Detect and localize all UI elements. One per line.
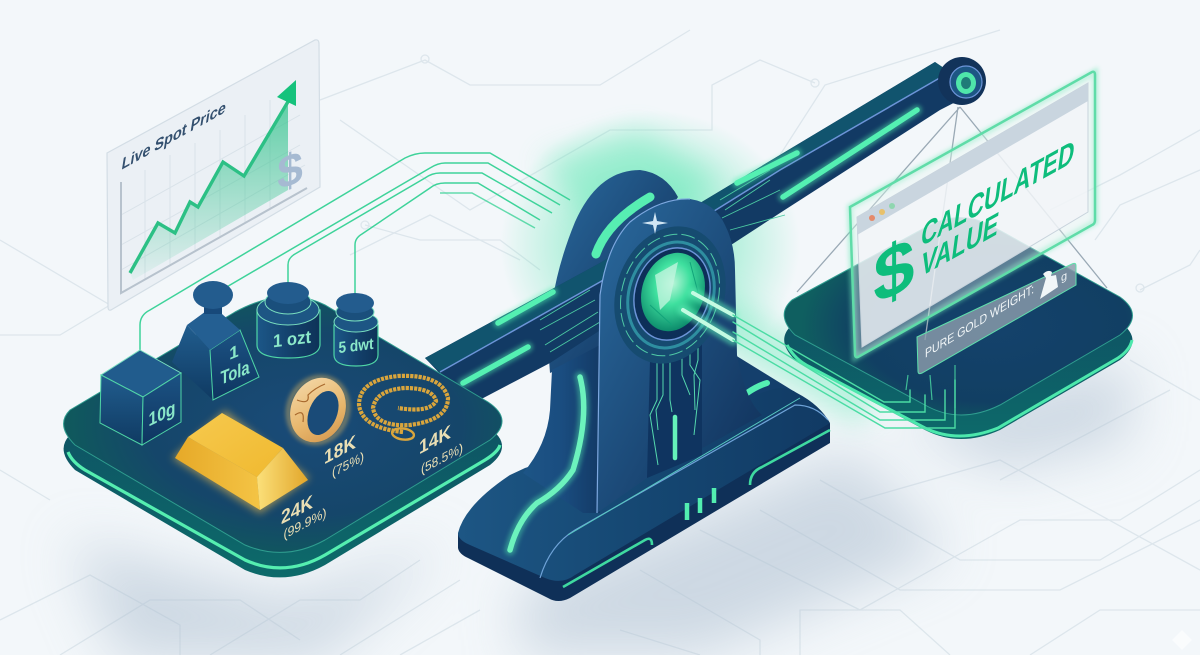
label: 24K: 24K (281, 491, 313, 529)
weight: 1 ozt (257, 282, 320, 358)
stand front pillar (597, 199, 762, 513)
top surface (784, 218, 1132, 415)
title bar (857, 83, 1088, 235)
cylinder body (334, 325, 378, 366)
suspension strings (797, 107, 1107, 340)
rear slot (747, 383, 767, 393)
glowing leg strip (510, 377, 584, 550)
base green slots (563, 430, 830, 587)
bar text: PURE GOLD WEIGHT: (925, 281, 1034, 361)
platform glowing rim (787, 340, 1132, 436)
base edge highlights (540, 405, 828, 578)
base front wall (458, 423, 830, 601)
window dots (869, 203, 895, 221)
trend line arrow (130, 80, 296, 273)
dollar sign: $ (873, 219, 915, 322)
reflection on platform (906, 365, 955, 408)
weight: 1 Tola: Tola (221, 356, 250, 390)
left platform (64, 296, 502, 577)
bar top (188, 413, 283, 477)
gold ring 18K (279, 369, 357, 451)
green glow behind the fulcrum (500, 110, 880, 425)
bar left slope (175, 437, 260, 510)
pillar rim highlight (597, 199, 690, 513)
chart grid (121, 100, 305, 280)
base rear (700, 355, 795, 450)
cube left face (100, 375, 143, 445)
glow beams (683, 293, 733, 340)
cylinder cap (336, 303, 374, 321)
calculated value window (797, 72, 1107, 408)
stand base (458, 355, 830, 601)
label: 18K (324, 431, 364, 481)
sparkle (642, 212, 668, 234)
lower layer (784, 242, 1132, 439)
arch glowing slot (596, 197, 650, 254)
beam highlight edge (440, 72, 950, 372)
base three indicator bars (687, 488, 714, 520)
stand left leg (523, 345, 600, 513)
dial plate (597, 212, 743, 378)
thin connector lines (733, 315, 955, 428)
ring hole (301, 386, 345, 440)
beam body (425, 62, 975, 405)
label: 1 ozt (273, 327, 311, 351)
emerald gem (631, 244, 715, 340)
body top face (187, 306, 240, 350)
scale beam (425, 57, 986, 405)
label: 10g (148, 397, 176, 431)
inner window (857, 83, 1088, 347)
base top (458, 388, 830, 581)
platform glowing rim (68, 445, 500, 568)
lower layer (64, 321, 502, 577)
dial circuit rings (605, 221, 735, 369)
beam glowing slots (463, 110, 917, 383)
shadows under objects (70, 360, 1130, 655)
unit g: g (1061, 268, 1067, 285)
pillar body (597, 199, 762, 513)
label: 24K (281, 491, 326, 543)
cube top (101, 350, 181, 397)
chart axes (121, 182, 307, 293)
small weight icon (1040, 271, 1058, 299)
beam circuit traces (540, 170, 785, 352)
label: 24K: (99.9%) (284, 505, 326, 543)
back arch of the stand (549, 170, 678, 373)
arch body (549, 170, 678, 373)
central dark channel (647, 335, 702, 478)
beam end cap (938, 57, 986, 105)
calculated value window: VALUE (919, 205, 1001, 285)
ring outer (281, 369, 355, 451)
chart glass card (107, 40, 320, 310)
bar right slope (257, 448, 308, 510)
right platform (784, 218, 1132, 439)
green connector lines from weights (140, 153, 570, 350)
label: 14K: 14K (419, 421, 451, 459)
cylinder cap (265, 290, 311, 314)
glow (172, 410, 310, 514)
bar background (917, 263, 1076, 374)
cube right face (142, 373, 181, 445)
chart area under line (130, 105, 288, 280)
outer glass frame (850, 72, 1095, 357)
gem dial (597, 212, 743, 378)
channel glowing bar (673, 417, 677, 458)
label: 18K: 18K (324, 431, 356, 469)
weight: 1 Tola (172, 281, 259, 400)
label: 1 (229, 341, 239, 364)
label: 14K: (58.5%) (421, 441, 463, 478)
beam upper strip (425, 62, 950, 372)
top surface (64, 296, 502, 552)
frame glow (850, 72, 1095, 358)
ring glow (279, 369, 357, 451)
chart title: Live Spot Price (120, 97, 228, 174)
cylinder body (257, 310, 320, 358)
ring engraved wave (295, 384, 325, 422)
weight: 5 dwt (334, 293, 378, 366)
dollar sign: $ (277, 141, 303, 201)
pure gold weight bar (917, 263, 1076, 374)
label: 5 dwt (338, 335, 374, 357)
calculated value text: CALCULATED (919, 133, 1077, 255)
gold chain 14K (359, 376, 448, 441)
channel circuit traces (650, 325, 700, 465)
bright beams (683, 293, 733, 340)
bottom right sparkle mark (1172, 630, 1192, 650)
green light beams from gem to right platform (683, 293, 955, 428)
weight: 10g cube (100, 350, 181, 445)
knob (193, 281, 233, 314)
chart panel: live spot price (107, 40, 320, 310)
label: 14K (419, 421, 463, 478)
label: 18K: (75%) (332, 449, 364, 481)
body right face (210, 330, 259, 400)
body left face (172, 325, 213, 400)
clasp (391, 427, 415, 441)
gold bar 24K (172, 410, 310, 514)
